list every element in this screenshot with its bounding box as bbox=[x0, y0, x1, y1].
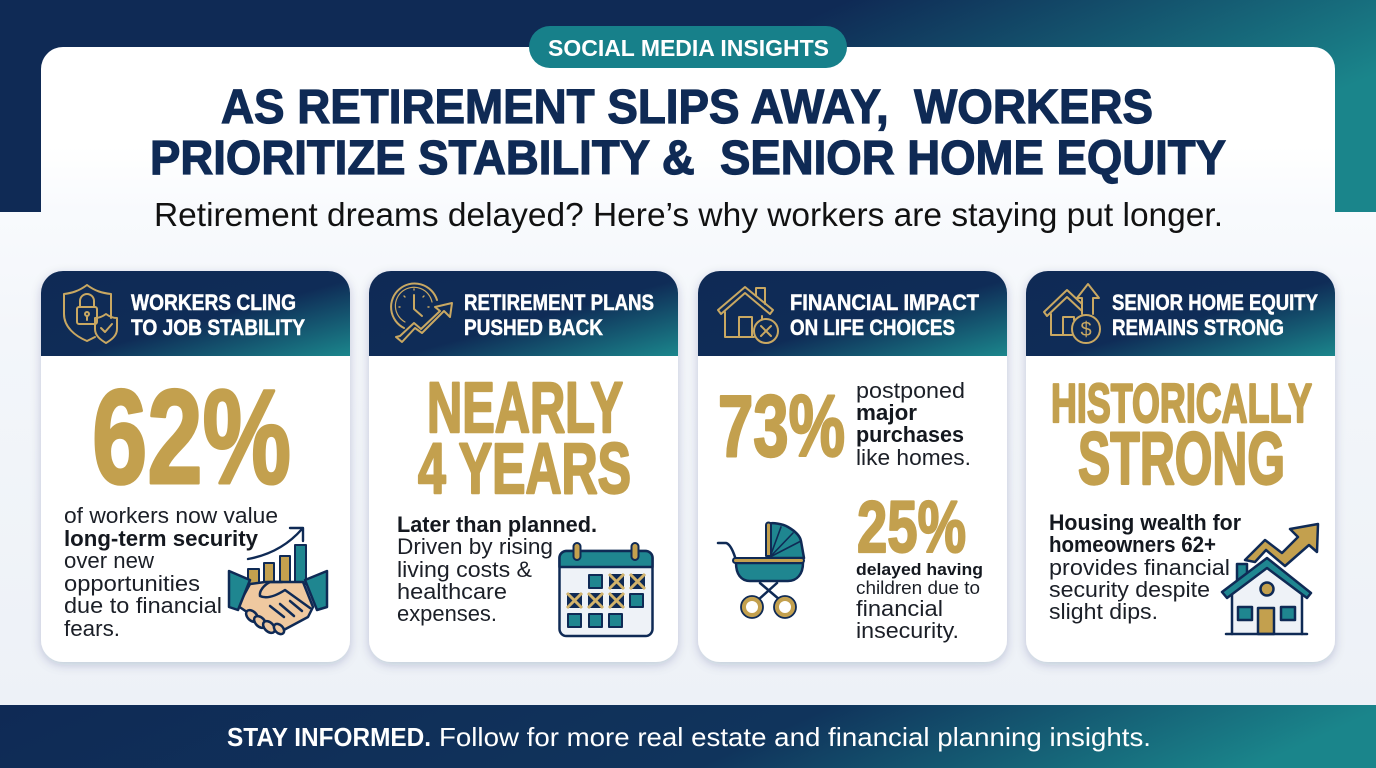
heading: WORKERS CLING bbox=[131, 290, 296, 315]
heading bbox=[464, 290, 654, 340]
text block: over new bbox=[64, 548, 154, 573]
text block: due to financial bbox=[64, 593, 222, 618]
icon: calendar bbox=[560, 543, 652, 636]
heading: RETIREMENT PLANS bbox=[464, 290, 654, 315]
stat: historically strong bbox=[1051, 372, 1312, 500]
text block: fears. bbox=[64, 616, 120, 641]
text block: long-term security bbox=[64, 526, 259, 551]
heading: PUSHED BACK bbox=[464, 315, 603, 340]
icon: clock with rising arrow bbox=[391, 284, 452, 342]
top banner bbox=[0, 0, 1376, 212]
title: AS RETIREMENT SLIPS AWAY, WORKERS bbox=[221, 81, 1153, 134]
subtitle: Retirement dreams delayed? Here’s why workers are staying put longer. bbox=[154, 196, 1223, 233]
heading bbox=[790, 290, 980, 340]
heading bbox=[1112, 290, 1318, 340]
text block: slight dips. bbox=[1049, 599, 1158, 624]
title bbox=[150, 81, 1226, 185]
stat: nearly 4 years bbox=[418, 369, 631, 509]
text block bbox=[1049, 510, 1241, 624]
footer bar bbox=[0, 705, 1376, 768]
text block: Housing wealth for bbox=[1049, 510, 1241, 535]
text block: homeowners 62+ bbox=[1049, 532, 1216, 557]
title: PRIORITIZE STABILITY & SENIOR HOME EQUITY bbox=[150, 132, 1226, 185]
stat: 62%: 62% bbox=[92, 363, 291, 512]
page background bbox=[0, 212, 1376, 705]
text block: expenses. bbox=[397, 601, 497, 626]
text block: opportunities bbox=[64, 571, 200, 596]
text block: delayed having children: delayed having bbox=[856, 560, 983, 579]
text block bbox=[64, 503, 278, 641]
heading bbox=[131, 290, 305, 340]
text block: security despite bbox=[1049, 577, 1210, 602]
icon: house with up arrow and dollar coin: $ bbox=[1080, 319, 1092, 341]
text block: delayed having children: financial bbox=[856, 596, 943, 621]
text block: postponed purchases: like homes. bbox=[856, 445, 971, 470]
text block: postponed purchases: postponed bbox=[856, 378, 965, 403]
heading: REMAINS STRONG bbox=[1112, 315, 1284, 340]
heading: TO JOB STABILITY bbox=[131, 315, 305, 340]
text block: postponed purchases: purchases bbox=[856, 422, 964, 447]
text block: postponed purchases bbox=[856, 378, 971, 470]
stat: 73%: 73% bbox=[718, 378, 845, 475]
icon: shield with padlock bbox=[64, 285, 117, 343]
footer text: Follow for more real estate and financial planning insights. bbox=[439, 722, 1151, 752]
text block: delayed having children bbox=[856, 560, 983, 643]
footer text: STAY INFORMED. bbox=[227, 722, 431, 752]
badge: social media insights: SOCIAL MEDIA INSIGHTS bbox=[548, 35, 829, 61]
stat: nearly 4 years: NEARLY bbox=[427, 369, 623, 448]
heading: SENIOR HOME EQUITY bbox=[1112, 290, 1318, 315]
text block: of workers now value bbox=[64, 503, 278, 528]
text block: provides financial bbox=[1049, 555, 1230, 580]
panel: retirement plans pushed back bbox=[369, 271, 678, 662]
text block bbox=[397, 512, 597, 626]
header panel bbox=[41, 47, 1335, 212]
text block: postponed purchases: major bbox=[856, 400, 917, 425]
panel: workers cling to job stability bbox=[41, 271, 350, 662]
stat: 25%: 25% bbox=[857, 487, 966, 568]
icon: handshake with rising bars bbox=[229, 528, 327, 636]
icon: baby stroller bbox=[718, 522, 804, 618]
text block: healthcare bbox=[397, 579, 507, 604]
icon: house with cross bbox=[718, 287, 778, 343]
text block: Driven by rising bbox=[397, 534, 553, 559]
heading: FINANCIAL IMPACT bbox=[790, 290, 980, 315]
stat: nearly 4 years: 4 YEARS bbox=[418, 430, 631, 509]
text block: Later than planned. bbox=[397, 512, 597, 537]
text block: living costs & bbox=[397, 557, 532, 582]
panel: financial impact on life choices bbox=[698, 271, 1007, 662]
heading: ON LIFE CHOICES bbox=[790, 315, 955, 340]
icon: house with up arrow and dollar coin bbox=[1044, 284, 1100, 343]
text block: delayed having children: children due to bbox=[856, 578, 980, 598]
icon: house with rising arrow bbox=[1222, 524, 1318, 634]
text block: delayed having children: insecurity. bbox=[856, 618, 959, 643]
panel: senior home equity remains strong bbox=[1026, 271, 1335, 662]
badge: social media insights bbox=[529, 26, 847, 68]
